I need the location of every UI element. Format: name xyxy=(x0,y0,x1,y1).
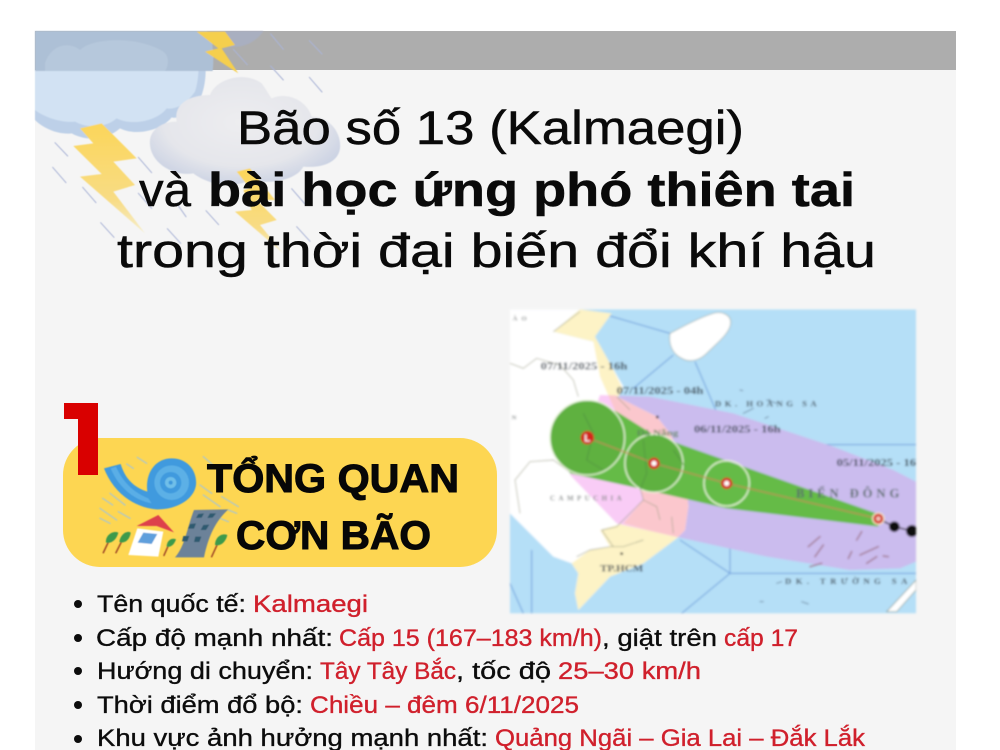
Paracel and sea dots xyxy=(740,390,808,604)
section heading text: TỔNG QUAN xyxy=(207,456,459,501)
grey cloud xyxy=(150,77,340,185)
map labels: 05/11/2025 - 16 xyxy=(837,457,917,469)
map labels: BIỂN ĐÔNG xyxy=(796,486,899,501)
danger zone over land xyxy=(570,394,644,529)
top grey band xyxy=(35,31,956,70)
Spratly islands xyxy=(808,532,888,567)
building xyxy=(175,509,228,557)
map labels: 07/11/2025 - 16h xyxy=(541,360,627,372)
danger zone over Vietnam xyxy=(608,394,689,538)
overview bullet list: Tên quốc tế: xyxy=(97,591,246,618)
forecast storm markers xyxy=(581,431,885,525)
radius circles xyxy=(550,400,749,506)
borders xyxy=(510,312,673,557)
storm track xyxy=(587,438,878,519)
overview bullet list: Tây Tây Bắc xyxy=(320,658,456,685)
east coast xyxy=(887,580,916,612)
grey cloud behind band xyxy=(207,31,263,47)
map labels: CAMPUCHIA xyxy=(550,495,622,503)
Vietnam central xyxy=(600,378,678,539)
overview bullet list: 25–30 km/h xyxy=(558,658,701,685)
map labels: DK. TRƯỜNG SA xyxy=(785,576,908,586)
lightning bolt left xyxy=(73,123,145,233)
title: bài học ứng phó thiên tai xyxy=(208,163,855,216)
maritime boundary lines xyxy=(510,315,916,613)
overview bullet list xyxy=(74,591,866,750)
map labels xyxy=(512,315,917,586)
past positions xyxy=(889,521,900,532)
map labels: DK. HOÀNG SA xyxy=(715,399,817,409)
storm clouds, lightning and rain illustration xyxy=(35,31,340,253)
overview bullet list: Chiều – đêm 6/11/2025 xyxy=(310,692,579,719)
map labels: Đà Nẵng xyxy=(637,428,679,438)
swirl xyxy=(104,458,196,509)
section number 1 xyxy=(64,403,98,475)
overview bullet list: Cấp 15 (167–183 km/h) xyxy=(339,625,602,652)
title xyxy=(117,101,876,277)
title: Bão số 13 (Kalmaegi) xyxy=(237,101,744,154)
overview bullet list: , tốc độ xyxy=(456,658,551,685)
storm danger zone xyxy=(618,395,917,570)
overview bullet list: cấp 17 xyxy=(724,625,798,652)
storm forecast map xyxy=(510,309,918,613)
Vietnam north xyxy=(553,309,623,398)
sea xyxy=(510,309,916,613)
section heading text xyxy=(207,456,459,558)
section heading text: CƠN BÃO xyxy=(236,514,431,558)
map labels: 07/11/2025 - 04h xyxy=(617,385,703,397)
overview bullet list: Cấp độ mạnh nhất: xyxy=(96,625,333,652)
title: trong thời đại biến đổi khí hậu xyxy=(117,224,876,277)
forecast cone xyxy=(568,410,880,528)
map labels: N xyxy=(512,414,517,421)
Vietnam south xyxy=(572,523,677,610)
icon: storm swirl and wind-blown house xyxy=(100,457,238,557)
trees xyxy=(103,539,219,557)
lightning bolt top xyxy=(197,32,238,73)
overview bullet list: Hướng di chuyển: xyxy=(97,658,313,685)
forecast storm markers: L xyxy=(584,434,590,445)
section heading pill xyxy=(63,403,497,567)
wind dashes xyxy=(100,457,238,523)
overview bullet list: Thời điểm đổ bộ: xyxy=(97,692,303,719)
map labels: TP.HCM xyxy=(600,565,644,575)
province lines in cone xyxy=(583,413,685,490)
land xyxy=(508,308,624,564)
blue cloud xyxy=(35,31,206,139)
title: và xyxy=(139,163,192,216)
Hainan island xyxy=(670,313,731,361)
rain streaks xyxy=(53,34,322,243)
overview bullet list: Kalmaegi xyxy=(253,591,368,618)
overview bullet list: , giật trên xyxy=(602,625,717,652)
lightning bolt centre xyxy=(235,168,283,253)
map labels: ÀO xyxy=(513,315,527,323)
map labels: 06/11/2025 - 16h xyxy=(694,424,781,436)
house xyxy=(128,528,163,557)
